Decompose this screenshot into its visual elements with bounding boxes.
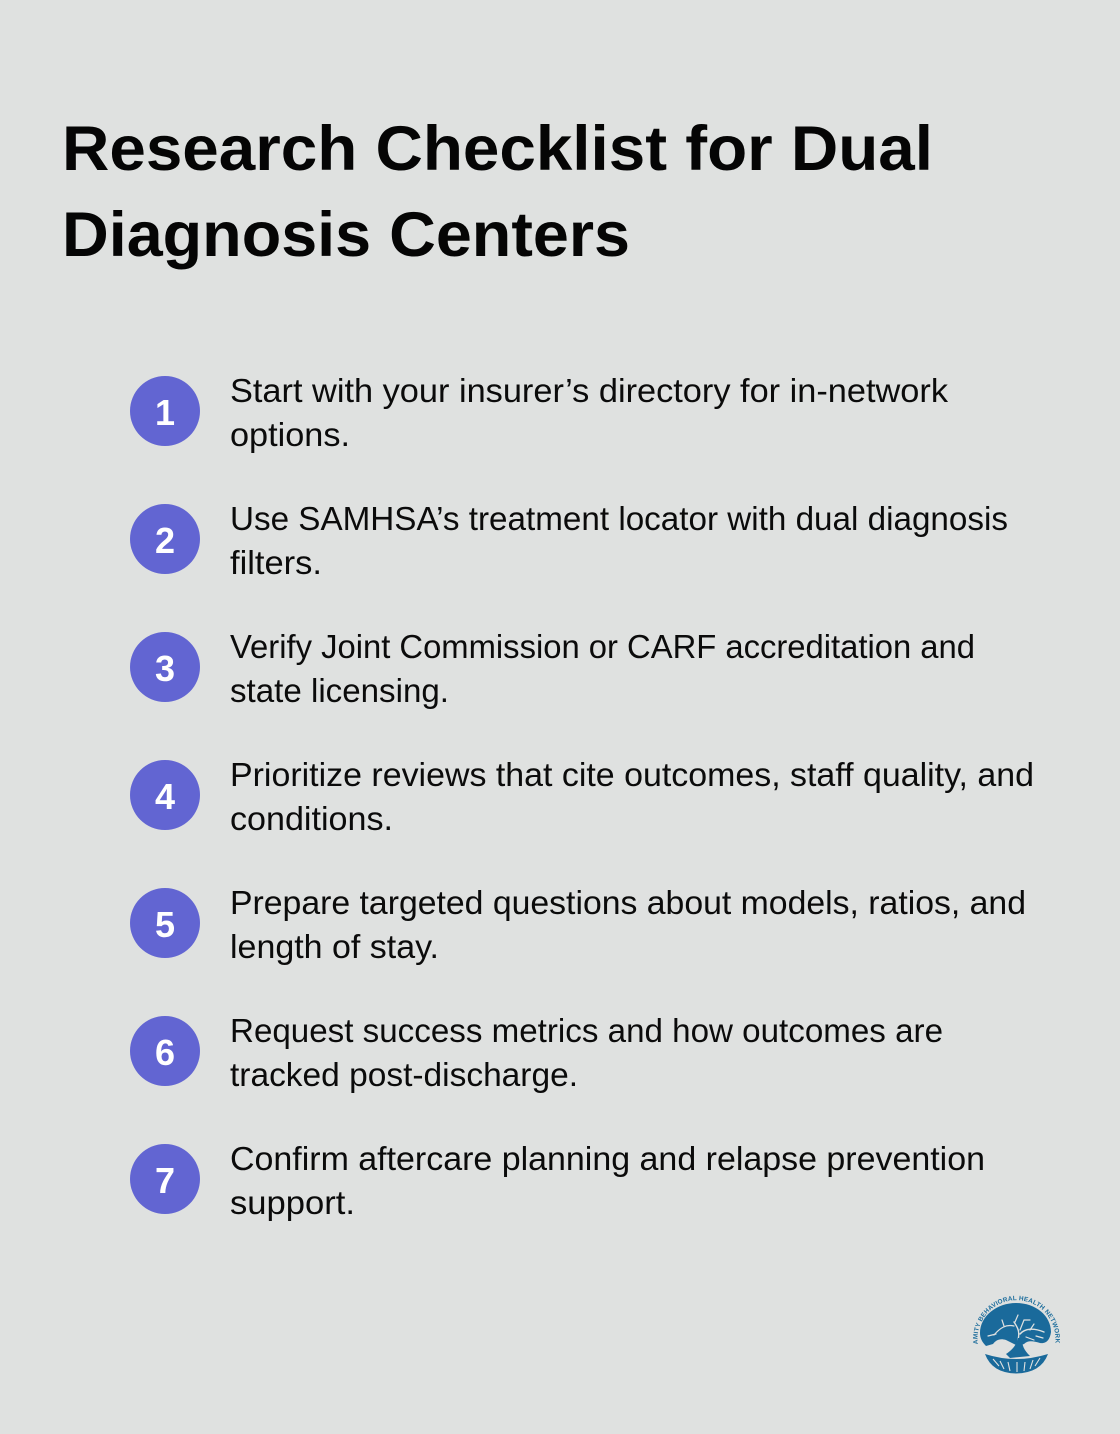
step 4 — [130, 757, 1034, 838]
logo: Amity Behavioral Health Network — [973, 1296, 1060, 1374]
step 6 — [130, 1013, 943, 1094]
logo tree branches — [988, 1315, 1044, 1340]
step 7 — [130, 1141, 985, 1222]
step 7: support. — [230, 1185, 355, 1222]
step 7: Confirm aftercare planning and relapse prevention — [230, 1141, 985, 1178]
step 6: tracked post-discharge. — [230, 1057, 578, 1094]
step 1 — [130, 373, 948, 454]
logo root bowl — [985, 1354, 1048, 1374]
title: Research Checklist for Dual — [62, 114, 933, 184]
step 4: 4 — [155, 776, 175, 817]
step 2: Use SAMHSA’s treatment locator with dual diagnosis — [230, 501, 1008, 538]
logo ring text: AMITY BEHAVIORAL HEALTH NETWORK — [973, 1296, 1060, 1344]
step 1: Start with your insurer’s directory for in-network — [230, 373, 948, 410]
step 1: options. — [230, 417, 350, 454]
title — [62, 114, 933, 270]
step 6: 6 — [155, 1032, 175, 1073]
step 5 — [130, 885, 1026, 966]
step 2: filters. — [230, 545, 322, 582]
checklist — [130, 373, 1034, 1222]
step 2 — [130, 501, 1008, 582]
step 3: 3 — [155, 648, 175, 689]
step 4: conditions. — [230, 801, 393, 838]
step 5: length of stay. — [230, 929, 439, 966]
step 7: 7 — [155, 1160, 175, 1201]
step 2: 2 — [155, 520, 175, 561]
logo trunk — [1006, 1338, 1030, 1358]
step 3 — [130, 629, 975, 710]
step 3: Verify Joint Commission or CARF accreditation and — [230, 629, 975, 666]
step 1: 1 — [155, 392, 175, 433]
step 4: Prioritize reviews that cite outcomes, staff quality, and — [230, 757, 1034, 794]
step 3: state licensing. — [230, 673, 449, 710]
logo tree canopy — [980, 1303, 1051, 1346]
step 5: Prepare targeted questions about models, ratios, and — [230, 885, 1026, 922]
title: Diagnosis Centers — [62, 200, 630, 270]
step 6: Request success metrics and how outcomes are — [230, 1013, 943, 1050]
step 5: 5 — [155, 904, 175, 945]
